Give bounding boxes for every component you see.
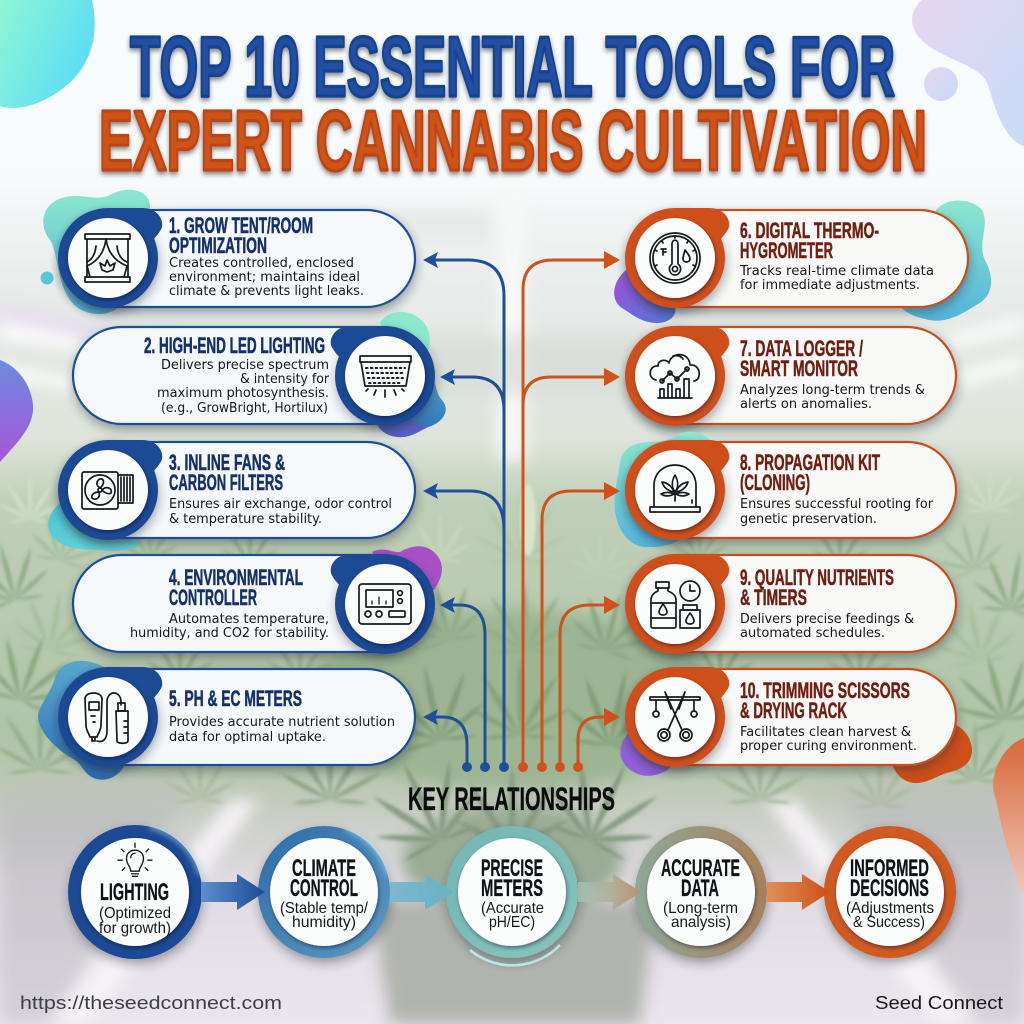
- panel: 2 LED lighting: [73, 312, 446, 437]
- panel: 10 trimming and drying: Facilitates clean harvest &: [740, 724, 911, 740]
- panel: 2 LED lighting: Delivers precise spectrum: [161, 357, 329, 373]
- title: [99, 20, 927, 189]
- flow node: accurate data: analysis): [671, 914, 731, 931]
- flow node: informed decisions: [824, 826, 956, 958]
- panel: 5 pH and EC meters: 5. PH & EC METERS: [169, 686, 302, 711]
- panel: 3 inline fans: 3. INLINE FANS &: [169, 450, 285, 475]
- panel: 6 thermo-hygrometer: [614, 200, 991, 323]
- panel: 5 pH and EC meters: data for optimal uptake.: [169, 729, 326, 745]
- flow node: lighting: LIGHTING: [100, 879, 169, 906]
- panel: 1 grow tent: environment; maintains ideal: [169, 269, 360, 285]
- panel: 2 LED lighting: (e.g., GrowBright, Hortilux): [161, 400, 328, 416]
- panel: 9 nutrients and timers: & TIMERS: [740, 585, 807, 610]
- flow node: accurate data: [635, 826, 767, 958]
- panel: 8 propagation kit: genetic preservation.: [740, 511, 877, 527]
- flow node: lighting: [68, 825, 202, 959]
- panel: 9 nutrients and timers: [625, 554, 956, 654]
- panel: 3 inline fans: & temperature stability.: [169, 511, 322, 527]
- panel: 6 thermo-hygrometer: 6. DIGITAL THERMO-: [740, 218, 879, 243]
- flow node: accurate data: DATA: [681, 875, 719, 902]
- panel: 9 nutrients and timers: Delivers precise feedings &: [740, 611, 914, 627]
- panel: 2 LED lighting: & intensity for: [240, 371, 329, 387]
- panel: 5 pH and EC meters: Provides accurate nutrient solution: [169, 714, 395, 730]
- flow arrow: climate to meters: [390, 874, 454, 910]
- flow node: precise meters: [446, 826, 578, 965]
- icon: dial thermometer: [650, 233, 700, 283]
- panel: 6 thermo-hygrometer: for immediate adjustments.: [740, 277, 920, 293]
- panel: 1 grow tent: [40, 190, 415, 314]
- panel: 1 grow tent: 1. GROW TENT/ROOM: [169, 213, 313, 238]
- flow node: informed decisions: & Success): [853, 914, 925, 931]
- flow node: climate control: (Stable temp/: [280, 900, 369, 917]
- flow arrow: lighting to climate: [201, 874, 265, 910]
- footer: url: https://theseedconnect.com: [20, 993, 282, 1013]
- connector arrows: orange: [518, 251, 620, 772]
- panel: 10 trimming and drying: [620, 667, 972, 783]
- icon: pH and EC meters: [85, 693, 128, 743]
- panel: 10 trimming and drying: proper curing environment.: [740, 738, 917, 754]
- panel: 3 inline fans: [48, 440, 415, 551]
- panel: 2 LED lighting: 2. HIGH-END LED LIGHTING: [144, 333, 325, 358]
- panel: 9 nutrients and timers: 9. QUALITY NUTRIENTS: [740, 565, 894, 590]
- panel: 1 grow tent: OPTIMIZATION: [169, 233, 267, 258]
- flow node: climate control: [258, 826, 390, 958]
- panel: 7 data logger: Analyzes long-term trends &: [740, 382, 925, 398]
- icon: tent window with curtains and leaf: [85, 234, 130, 282]
- flow node: lighting: for growth): [99, 920, 171, 937]
- icon: controller: [359, 584, 411, 624]
- footer: brand: Seed Connect: [875, 993, 1003, 1013]
- icon: LED panel: [360, 356, 411, 397]
- flow node: climate control: CONTROL: [290, 875, 358, 902]
- panel: 2 LED lighting: maximum photosynthesis.: [157, 385, 329, 401]
- flow node: precise meters: PRECISE: [481, 855, 543, 882]
- flow node: climate control: humidity): [292, 914, 356, 931]
- panel: 8 propagation kit: (CLONING): [740, 470, 810, 495]
- heading: key relationships: KEY RELATIONSHIPS: [408, 781, 615, 817]
- flow node: precise meters: pH/EC): [489, 914, 535, 931]
- panel: 1 grow tent: climate & prevents light leaks.: [169, 283, 364, 299]
- icon: inline fan and filter: [82, 472, 133, 509]
- panel: 4 environmental controller: 4. ENVIRONMENTAL: [169, 565, 303, 590]
- flow node: informed decisions: DECISIONS: [850, 875, 929, 902]
- panel: 4 environmental controller: humidity, and CO2 for stability.: [130, 625, 329, 641]
- panel: 10 trimming and drying: 10. TRIMMING SCISSORS: [740, 678, 910, 703]
- icon: lightbulb: [118, 843, 152, 876]
- panel: 4 environmental controller: CONTROLLER: [169, 585, 257, 610]
- panel: 5 pH and EC meters: [38, 661, 415, 780]
- panel: 8 propagation kit: [615, 432, 956, 547]
- panel: 7 data logger: SMART MONITOR: [740, 356, 858, 381]
- panel: 6 thermo-hygrometer: HYGROMETER: [740, 238, 833, 263]
- flow node: lighting: (Optimized: [99, 905, 171, 922]
- panel: 7 data logger: alerts on anomalies.: [740, 396, 872, 412]
- panel: 3 inline fans: CARBON FILTERS: [169, 470, 283, 495]
- flow node: accurate data: ACCURATE: [661, 855, 740, 882]
- panel: 3 inline fans: Ensures air exchange, odor control: [169, 496, 392, 512]
- icon: nutrient bottles and clock: [651, 581, 700, 628]
- panel: 4 environmental controller: Automates temperature,: [169, 611, 329, 627]
- flow node: accurate data: (Long-term: [663, 900, 738, 917]
- flow node: informed decisions: (Adjustments: [846, 900, 934, 917]
- panel: 10 trimming and drying: & DRYING RACK: [740, 698, 847, 723]
- flow node: precise meters: (Accurate: [481, 900, 544, 917]
- panel: 7 data logger: [625, 326, 956, 426]
- panel: 4 environmental controller: [73, 546, 442, 654]
- icon: scissors and rack: [650, 692, 700, 741]
- panel: 9 nutrients and timers: automated schedules.: [740, 625, 885, 641]
- flow node: informed decisions: INFORMED: [850, 855, 929, 882]
- icon: propagation dome: [650, 465, 700, 512]
- panel: 8 propagation kit: 8. PROPAGATION KIT: [740, 450, 880, 475]
- panel: 6 thermo-hygrometer: Tracks real-time climate data: [739, 263, 934, 279]
- flow arrow: data to decisions: [767, 874, 830, 910]
- connector arrows: blue: [423, 252, 509, 772]
- flow node: precise meters: METERS: [481, 875, 543, 902]
- panel: 8 propagation kit: Ensures successful rooting for: [740, 496, 933, 512]
- flow node: climate control: CLIMATE: [292, 855, 356, 882]
- panel: 7 data logger: 7. DATA LOGGER /: [740, 336, 863, 361]
- panel: 1 grow tent: Creates controlled, enclosed: [169, 255, 354, 271]
- icon: cloud with chart: [650, 355, 699, 398]
- flow arrow: meters to data: [578, 874, 641, 910]
